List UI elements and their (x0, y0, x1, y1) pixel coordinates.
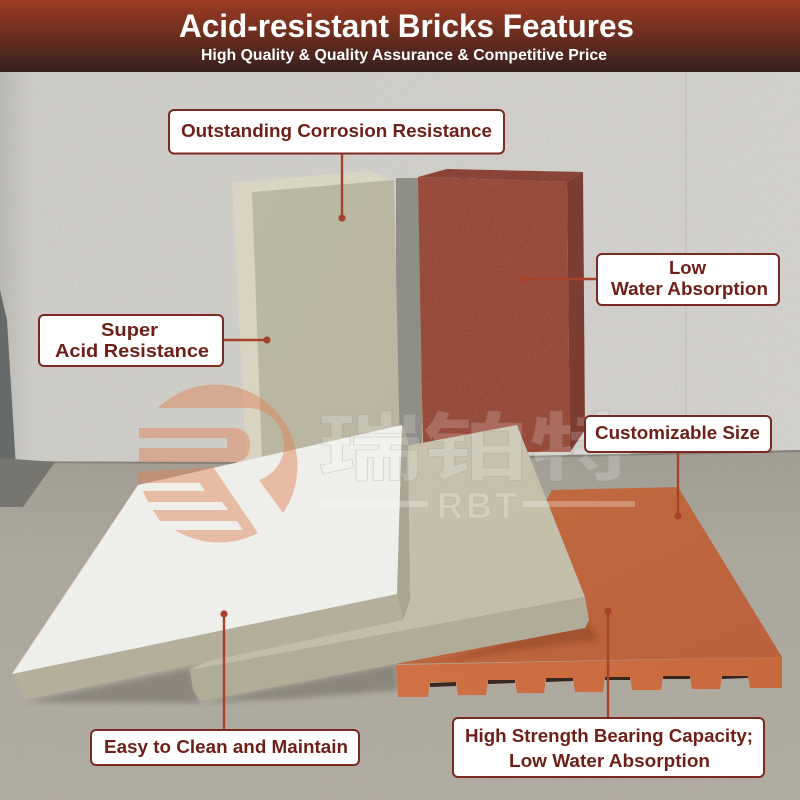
callout: super acid resistance (39, 315, 271, 366)
callout: high strength: High Strength Bearing Capacity; (465, 726, 753, 746)
white slab (12, 425, 410, 700)
callout: low water absorption: Water Absorption (611, 279, 768, 299)
watermark logo (138, 385, 297, 543)
red brick standing (418, 169, 585, 455)
callout: super acid resistance: Acid Resistance (55, 341, 209, 361)
callout: high strength (453, 607, 764, 777)
watermark text: 瑞铂特 (317, 407, 635, 490)
title: Acid-resistant Bricks Features (179, 8, 634, 44)
callout: customizable size (585, 416, 771, 520)
callout: easy to clean (91, 610, 359, 765)
terracotta slab with grooved edge (396, 487, 782, 697)
subtitle: High Quality & Quality Assurance & Competitive Price (201, 47, 607, 64)
callout: low water absorption: Low (669, 258, 707, 278)
callout: corrosion resistance (169, 110, 504, 222)
callout: customizable size: Customizable Size (595, 423, 760, 443)
beige slab (190, 425, 589, 701)
callout: corrosion resistance: Outstanding Corrosion Resistance (181, 121, 492, 141)
callout: easy to clean: Easy to Clean and Maintain (104, 737, 348, 757)
watermark text: RBT (437, 485, 517, 526)
callout: super acid resistance: Super (101, 320, 158, 340)
header banner (0, 0, 800, 72)
beige brick standing (232, 171, 422, 460)
watermark text (317, 407, 635, 526)
callout: high strength: Low Water Absorption (509, 751, 710, 771)
callout: low water absorption (519, 254, 779, 305)
